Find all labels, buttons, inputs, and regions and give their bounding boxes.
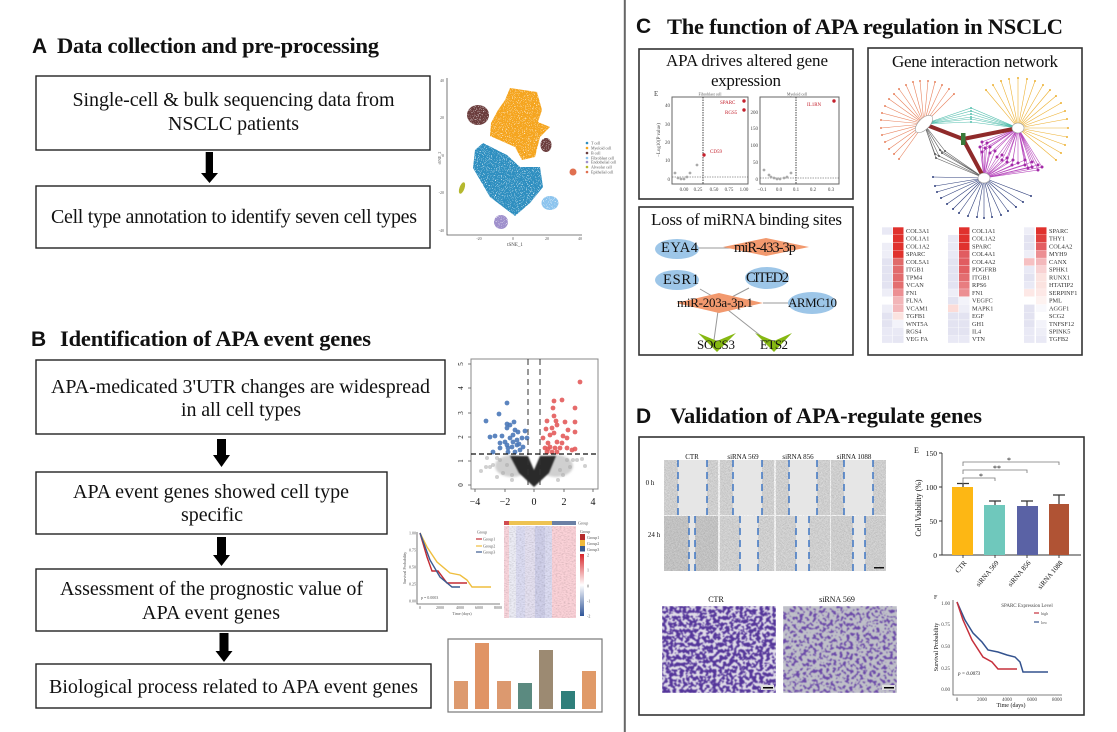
SPARC survival curve: F [934, 595, 938, 601]
scatter: fibroblast cell: 30 [665, 123, 670, 128]
panel: APA drives altered gene expression [639, 49, 853, 199]
box: sequencing data [36, 76, 430, 150]
volcano plot: 3 [457, 411, 465, 415]
box: sequencing data: Single-cell & bulk sequencing data from [72, 89, 395, 111]
section D heading: D [636, 405, 651, 428]
survival legend: Group3 [483, 550, 495, 554]
wound labels: siRNA 1088 [837, 453, 872, 461]
category labels: siRNA 569 [974, 559, 1001, 588]
gene heatmap column 1: WNT5A [906, 321, 928, 328]
section A heading: A [32, 35, 47, 58]
box: cell type annotation: Cell type annotation to identify seven cell types [51, 206, 417, 228]
arrow: B step 3 to 4 [216, 633, 232, 662]
legend: cell types: Alveolar cell [591, 164, 613, 170]
transwell CTR image [662, 606, 776, 693]
volcano plot: 5 [457, 362, 465, 366]
scatter: myeloid cell: −0.1 [757, 188, 767, 193]
expression heatmap [504, 520, 599, 618]
error bars [957, 484, 1065, 506]
cluster: B cells small [540, 138, 552, 152]
teal links [924, 108, 1018, 128]
category labels [954, 559, 1065, 591]
gene heatmap column 2: VEGFC [972, 298, 993, 305]
panel heading [666, 51, 828, 90]
wound labels: siRNA 569 [727, 453, 759, 461]
divider between left and right sections [624, 0, 626, 732]
heatmap legend: -2 [587, 614, 590, 618]
cluster: endothelial [494, 215, 508, 229]
gene heatmap column 3: THY1 [1049, 236, 1065, 243]
scatter: myeloid cell: 0.3 [828, 188, 835, 193]
panel: validation experiments [639, 437, 1084, 715]
scatter: myeloid cell: 0.2 [810, 188, 817, 193]
gene heatmap column 2: VTN [972, 336, 985, 343]
legend: cell types: Myeloid cell [591, 146, 612, 150]
gene heatmap column 2: GH1 [972, 321, 984, 328]
gene heatmap column 3: RUNX1 [1049, 274, 1070, 281]
chevron: SOCS3 target [698, 333, 736, 352]
survival curve for APA event gene groups: p = 0.0003 [421, 595, 438, 600]
hub 1 [912, 112, 936, 136]
hub 3 [978, 173, 990, 183]
SPARC survival curve: 0.25 [941, 667, 950, 672]
volcano plot: 0 [532, 497, 536, 508]
SPARC survival curve: 1.00 [941, 602, 950, 607]
cell viability bar chart: ** [993, 464, 1001, 473]
node: ESR1: ESR1 [663, 272, 699, 288]
gene heatmap column 1: ITGB1 [906, 267, 924, 274]
section D heading: Validation of APA-regulate genes [670, 403, 982, 428]
wound labels: siRNA 856 [782, 453, 814, 461]
scatter: myeloid cell: 100 [750, 144, 758, 149]
gene heatmap column 1: FLNA [906, 298, 923, 305]
box: cell type specific [36, 472, 387, 534]
gene heatmap column 2: IL4 [972, 328, 982, 336]
gene heatmap column 2: PDGFRB [972, 267, 996, 274]
SPARC survival curve: Survival Probability [934, 623, 940, 671]
gene heatmap column 3: SCG2 [1049, 313, 1064, 320]
SPARC survival curve: 6000 [1027, 698, 1038, 703]
gene heatmap column 1: VEG FA [906, 336, 929, 343]
heatmap legend: Group1 [587, 535, 599, 540]
wound images [664, 460, 886, 571]
node: CITED2: CITED2 [746, 270, 789, 286]
section C heading: C [636, 15, 651, 38]
cluster: epithelial [570, 168, 576, 176]
box: biological process [36, 664, 431, 708]
volcano plot: −2 [500, 497, 510, 508]
gene heatmap column 1: VCAN [906, 282, 924, 289]
survival legend: high [1041, 611, 1048, 616]
scatter: fibroblast cell: 20 [665, 141, 670, 146]
legend: cell types: B cell [591, 150, 601, 156]
gene heatmap column 3: CANX [1049, 259, 1067, 266]
tSNE cell type plot: -20 [476, 236, 482, 241]
survival curve for APA event gene groups: 8000 [494, 605, 502, 610]
scatter: myeloid cell: 200 [750, 111, 758, 116]
scatter: fibroblast cell: RGS5 [725, 111, 738, 116]
SPARC survival curve: 4000 [1002, 698, 1012, 703]
survival legend: Group1 [483, 536, 495, 542]
cell viability bar chart: Cell Viability (%) [914, 479, 923, 537]
scatter: fibroblast cell: 0.00 [680, 188, 689, 193]
legend: cell types: Epithelial cell [591, 170, 614, 174]
scatter: fibroblast cell: 0.50 [710, 188, 719, 193]
wound labels: CTR [685, 453, 699, 461]
volcano plot: −4 [470, 497, 480, 508]
node: EYA4: EYA4 [661, 240, 699, 256]
scatter: myeloid cell: 150 [750, 127, 758, 132]
box: prognostic value [36, 569, 387, 631]
transwell siRNA 569 image [783, 606, 897, 693]
survival legend [1034, 611, 1048, 625]
gene heatmap column 2: MAPK1 [972, 305, 993, 312]
gene heatmap column 3: PML [1049, 298, 1062, 305]
arrow: A step 1 to 2 [201, 152, 218, 183]
scatter: myeloid cell: 50 [753, 161, 758, 166]
gene heatmap column 1: COL3A1 [906, 228, 929, 235]
survival legend: low [1041, 620, 1047, 625]
SPARC survival curve: p = 0.0073 [957, 672, 981, 677]
gene heatmap column 1: RGS4 [906, 328, 922, 336]
wound labels [646, 453, 872, 539]
SPARC survival curve: 0.00 [941, 688, 950, 693]
survival curve for APA event gene groups: 1.00 [409, 530, 416, 536]
category labels: siRNA 856 [1006, 559, 1033, 588]
panel: gene interaction network [868, 48, 1082, 355]
volcano plot: 2 [457, 435, 465, 439]
gene heatmap column 3: TNFSF12 [1049, 321, 1074, 328]
tSNE cell type plot: 40 [440, 78, 444, 83]
volcano plot: 4 [457, 386, 465, 390]
gene heatmap column 1: TPM4 [906, 274, 923, 281]
SPARC survival curve: 0.75 [941, 623, 950, 628]
survival curve for APA event gene groups: Time (days) [452, 611, 472, 616]
tSNE cell type plot: tSNE_1 [507, 243, 523, 248]
SPARC survival curve: SPARC Expression Level [1001, 604, 1053, 609]
cell viability bar chart: 100 [926, 483, 937, 492]
yellow rays [986, 78, 1068, 160]
gene heatmap column 2: RPS6 [972, 282, 986, 289]
panel: loss of miRNA binding sites [639, 207, 853, 355]
heatmap legend: Group3 [587, 547, 599, 552]
volcano plot: 1 [457, 459, 465, 463]
scatter: myeloid cell [750, 92, 839, 193]
gene heatmap column 1: TGFB1 [906, 313, 925, 320]
gene heatmap column 2: ITGB1 [972, 274, 990, 281]
gene heatmap column 3 [1024, 227, 1077, 343]
legend: cell types: Fibroblast cell [591, 156, 615, 160]
bar chart: biological processes [448, 639, 602, 712]
category labels: siRNA 1088 [1036, 559, 1065, 591]
box: prognostic value: APA event genes [142, 602, 280, 624]
transwell assay: siRNA 569 [819, 595, 855, 604]
heatmap legend: 1 [587, 568, 589, 572]
significance brackets [963, 462, 1059, 484]
gene heatmap column 3: AGGF1 [1049, 305, 1069, 312]
cluster: fibroblast [542, 196, 558, 210]
gene heatmap column 3: COL4A2 [1049, 244, 1072, 250]
heatmap legend: Group2 [587, 541, 599, 546]
volcano plot [457, 359, 598, 508]
transwell assay [662, 595, 897, 693]
volcano: blue points [484, 401, 529, 454]
gene heatmap column 2: EGF [972, 313, 984, 320]
gene heatmap column 1: COL1A2 [906, 244, 929, 250]
box: biological process: Biological process related to APA event genes [49, 676, 418, 698]
SPARC survival curve: 8000 [1052, 698, 1062, 703]
scatter: fibroblast cell: SPARC [720, 101, 736, 106]
cluster: alveolar [458, 182, 466, 194]
category labels: CTR [954, 559, 969, 575]
legend: cell types: T cell [591, 140, 601, 146]
node: miR-203a-3p.1: miR-203a-3p.1 [677, 295, 753, 310]
gene heatmap column 2: COL4A2 [972, 259, 995, 266]
legend: cell types [586, 140, 617, 174]
tSNE cell type plot [437, 78, 617, 248]
panel heading: expression [711, 71, 782, 90]
central node [961, 133, 966, 145]
node: ARMC10 [788, 292, 837, 314]
survival curve for APA event gene groups: 4000 [456, 605, 464, 610]
gene heatmap column 2 [948, 227, 996, 343]
label: ETS2: ETS2 [760, 337, 788, 352]
network links [697, 248, 790, 340]
volcano: grey points [479, 455, 587, 482]
scatter: myeloid cell: 0 [756, 178, 758, 183]
survival curve for APA event gene groups: 0.25 [409, 582, 416, 586]
node: miR-433-3p: miR-433-3p [734, 240, 796, 256]
box: sequencing data: NSCLC patients [168, 113, 299, 135]
cluster: T cells [473, 143, 543, 216]
box: cell type specific: APA event genes showed cell type [73, 481, 349, 503]
gene heatmap column 1: FN1 [906, 290, 917, 297]
volcano plot: 0 [457, 483, 465, 487]
gene heatmap column 2: COL1A1 [972, 228, 995, 235]
scratch gaps [678, 460, 873, 571]
scale bars [761, 685, 895, 690]
gene heatmap column 1: VCAM1 [906, 305, 928, 312]
legend: cell types: Endothelial cell [591, 160, 617, 164]
box: 3'UTR changes [36, 360, 445, 434]
arrow: B step 2 to 3 [213, 537, 230, 566]
survival curve for APA event gene groups: 2000 [436, 605, 444, 610]
transwell assay: CTR [708, 595, 724, 604]
heatmap legend: -1 [587, 598, 590, 604]
cell viability bar chart: 50 [930, 517, 937, 526]
label: SOCS3: SOCS3 [697, 337, 735, 352]
node: miR-203a-3p.1 [676, 293, 763, 313]
gene heatmap column 2: COL4A1 [972, 251, 995, 258]
section A heading: Data collection and pre-processing [57, 33, 380, 58]
cluster: B cells [467, 105, 489, 125]
tSNE cell type plot: -20 [439, 190, 444, 195]
tSNE cell type plot: 40 [578, 236, 582, 241]
cell viability bar chart: * [979, 472, 983, 481]
section B heading: B [31, 328, 46, 351]
orange rays [881, 81, 954, 159]
scatter: fibroblast cell: 10 [665, 159, 670, 164]
box: prognostic value: Assessment of the prognostic value of [60, 578, 363, 600]
scatter: fibroblast cell: 40 [665, 104, 670, 109]
scatter: myeloid cell: Myeloid cell [787, 92, 808, 96]
arrow: B step 1 to 2 [213, 439, 230, 467]
survival legend: Group2 [483, 544, 495, 548]
heatmap legend: Group [580, 529, 590, 534]
scatter: myeloid cell: 0.0 [776, 188, 783, 193]
scatter: myeloid cell: IL1RN [807, 103, 822, 108]
scatter: fibroblast cell: 0.25 [694, 188, 703, 193]
tSNE cell type plot: 0 [512, 236, 514, 241]
scatter: fibroblast cell: Fibroblast cell [698, 92, 722, 96]
gene heatmap column 2: COL1A2 [972, 236, 995, 243]
node: EYA4 [655, 239, 699, 259]
scatter: fibroblast cell: −Log10(P value) [657, 123, 662, 157]
cell viability bar chart: * [1007, 456, 1011, 465]
gene heatmap column 3: SERPINF1 [1049, 290, 1077, 297]
gene heatmap column 2: FN1 [972, 290, 983, 297]
cell viability bar chart: 150 [926, 449, 937, 458]
magenta links [980, 128, 1042, 178]
gene heatmap column 3: SPARC [1049, 228, 1068, 235]
survival legend [476, 530, 495, 554]
panel heading: Loss of miRNA binding sites [651, 210, 842, 229]
gene heatmap column 3: TGFB2 [1049, 336, 1068, 343]
tSNE cell type plot: 20 [440, 115, 444, 120]
scatter: fibroblast cell: 1.00 [740, 188, 749, 193]
gene heatmap column 1: COL5A1 [906, 259, 929, 266]
gene heatmap column 3: HTATIP2 [1049, 282, 1073, 289]
heatmap legend [580, 529, 599, 618]
brown hub links [924, 124, 1018, 178]
cell viability bar chart: 0 [933, 551, 937, 560]
heatmap legend: 0 [587, 584, 589, 588]
node: ESR1 [655, 270, 699, 290]
scratch edge lines [678, 460, 873, 571]
SPARC survival curve: 0 [956, 698, 959, 703]
section C heading: The function of APA regulation in NSCLC [667, 14, 1063, 39]
gene heatmap column 1 [882, 227, 929, 343]
scale bar [874, 567, 884, 568]
survival curve for APA event gene groups: Survival Probability [402, 552, 407, 584]
grey links [924, 124, 984, 178]
SPARC survival curve: 2000 [977, 698, 988, 703]
scatter: fibroblast cell: CD59 [710, 150, 722, 155]
gene heatmap column 1: SPARC [906, 251, 925, 258]
gene heatmap column 2: SPARC [972, 244, 991, 250]
tSNE cell type plot: -40 [439, 228, 444, 233]
node: ARMC10: ARMC10 [788, 295, 837, 310]
tSNE cell type plot: tSNE_2 [437, 152, 442, 164]
scatter: myeloid cell: 0.1 [793, 188, 800, 193]
cell viability bar chart: E [914, 446, 919, 455]
expression heatmap: Group [578, 520, 588, 526]
tSNE cell type plot: 0 [442, 153, 444, 158]
cell viability bar chart [914, 446, 1081, 591]
cluster: myeloid cells [490, 88, 550, 160]
box: 3'UTR changes: in all cell types [181, 399, 301, 421]
wound labels: 0 h [646, 479, 655, 487]
survival curve for APA event gene groups [402, 530, 502, 616]
heatmap legend: 2 [587, 552, 589, 558]
survival curve for APA event gene groups: 0.00 [409, 598, 416, 604]
survival legend: Group [477, 530, 487, 534]
SPARC survival curve: Time (days) [997, 702, 1025, 709]
survival curve for APA event gene groups: 0.50 [409, 564, 416, 570]
gene heatmap column 3: SPINK5 [1049, 328, 1070, 336]
node: miR-433-3p [723, 238, 809, 256]
panel heading: APA drives altered gene [666, 51, 828, 70]
box: cell type specific: specific [181, 504, 243, 526]
survival curve for APA event gene groups: 6000 [475, 605, 483, 610]
volcano: red points [541, 380, 582, 454]
SPARC survival curve [934, 595, 1062, 709]
chevron: ETS2 target [755, 333, 792, 352]
volcano plot: 2 [562, 497, 566, 508]
hub 2 [1012, 123, 1024, 133]
survival curve for APA event gene groups: 0.75 [409, 548, 416, 552]
network graph [881, 78, 1068, 218]
box: cell type annotation [36, 186, 430, 248]
gene heatmap column 1: COL1A1 [906, 236, 929, 243]
gene heatmap column 3: MYH9 [1049, 251, 1067, 258]
wound healing assay [646, 453, 886, 571]
gene heatmap column 3: SPHK1 [1049, 267, 1068, 274]
scatter: fibroblast cell [657, 92, 749, 193]
navy rays [933, 177, 1031, 218]
panel heading: Gene interaction network [892, 52, 1058, 71]
section B heading: Identification of APA event genes [60, 326, 371, 351]
wound labels: 24 h [648, 531, 661, 539]
SPARC survival curve: 0.50 [941, 645, 950, 650]
scatter: fibroblast cell: 0 [668, 178, 670, 183]
volcano: dense black points [510, 456, 556, 487]
survival curve for APA event gene groups: 0 [419, 605, 421, 610]
scatter: fibroblast cell: 0.75 [725, 188, 734, 193]
volcano plot: 4 [590, 497, 596, 508]
box: 3'UTR changes: APA-medicated 3'UTR changes are widespread [51, 376, 430, 398]
tSNE cell type plot: 20 [545, 236, 549, 241]
panel: APA drives altered gene expression: E [654, 90, 658, 98]
